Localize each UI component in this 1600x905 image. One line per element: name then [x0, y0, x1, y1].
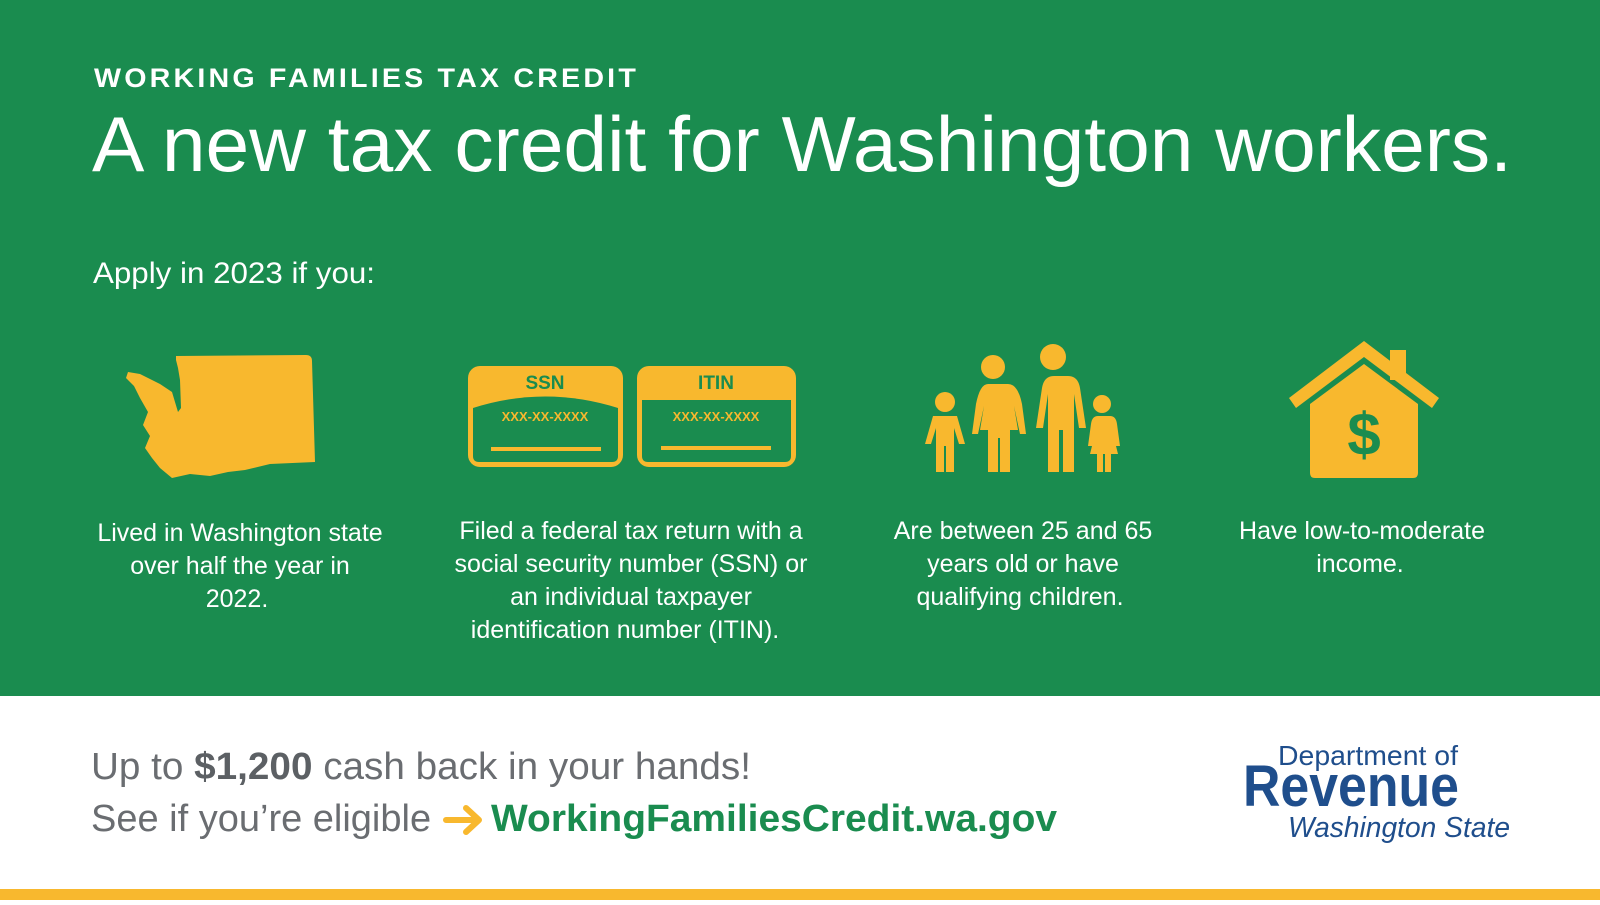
apply subheading: Apply in 2023 if you:	[93, 257, 375, 290]
icon: ITIN card: XXX-XX-XXXX	[673, 409, 760, 424]
caption: age: years old or have	[927, 550, 1119, 578]
icon: house with dollar	[1289, 341, 1439, 478]
icon: ITIN card: ITIN	[698, 373, 734, 394]
logo: Department of Revenue: Washington State	[1288, 812, 1510, 844]
logo: Department of Revenue: Department of	[1278, 740, 1458, 771]
logo: Department of Revenue: Revenue	[1243, 754, 1459, 819]
eligibility line	[91, 798, 1057, 840]
caption: age: qualifying children.	[916, 583, 1124, 611]
logo: Department of Revenue	[1243, 740, 1510, 844]
icon: washington state map	[126, 355, 315, 478]
icon: SSN card	[468, 366, 623, 467]
caption: age	[894, 517, 1152, 611]
eyebrow heading: WORKING FAMILIES TAX CREDIT	[94, 63, 639, 93]
caption: lived in WA: over half the year in	[130, 552, 350, 580]
caption: lived in WA: Lived in Washington state	[97, 519, 383, 547]
caption: income: income.	[1316, 550, 1404, 578]
caption: filed tax return: social security number (SSN) or	[455, 550, 807, 578]
caption: income	[1239, 517, 1485, 578]
green panel background	[0, 0, 1600, 696]
caption: age: Are between 25 and 65	[894, 517, 1152, 545]
icon: family	[925, 344, 1120, 472]
caption: lived in WA: 2022.	[206, 585, 268, 613]
caption: filed tax return: identification number (ITIN).	[471, 616, 779, 644]
yellow bottom bar	[0, 889, 1600, 900]
icon: house with dollar: $	[1347, 401, 1381, 468]
icon: SSN card: SSN	[525, 373, 565, 394]
caption: filed tax return: an individual taxpayer	[510, 583, 752, 611]
cash back line: Up to $1,200 cash back in your hands!	[91, 746, 751, 788]
eligibility line: See if you’re eligible	[91, 798, 431, 840]
eligibility line: WorkingFamiliesCredit.wa.gov	[491, 798, 1057, 840]
icon: ITIN card	[637, 366, 796, 467]
icon: SSN card: XXX-XX-XXXX	[502, 409, 589, 424]
caption: filed tax return: Filed a federal tax return with a	[459, 517, 803, 545]
arrow	[446, 808, 479, 832]
caption: filed tax return	[455, 517, 807, 644]
title: A new tax credit for Washington workers.	[92, 100, 1512, 188]
caption: lived in WA	[97, 519, 383, 613]
caption: income: Have low-to-moderate	[1239, 517, 1485, 545]
